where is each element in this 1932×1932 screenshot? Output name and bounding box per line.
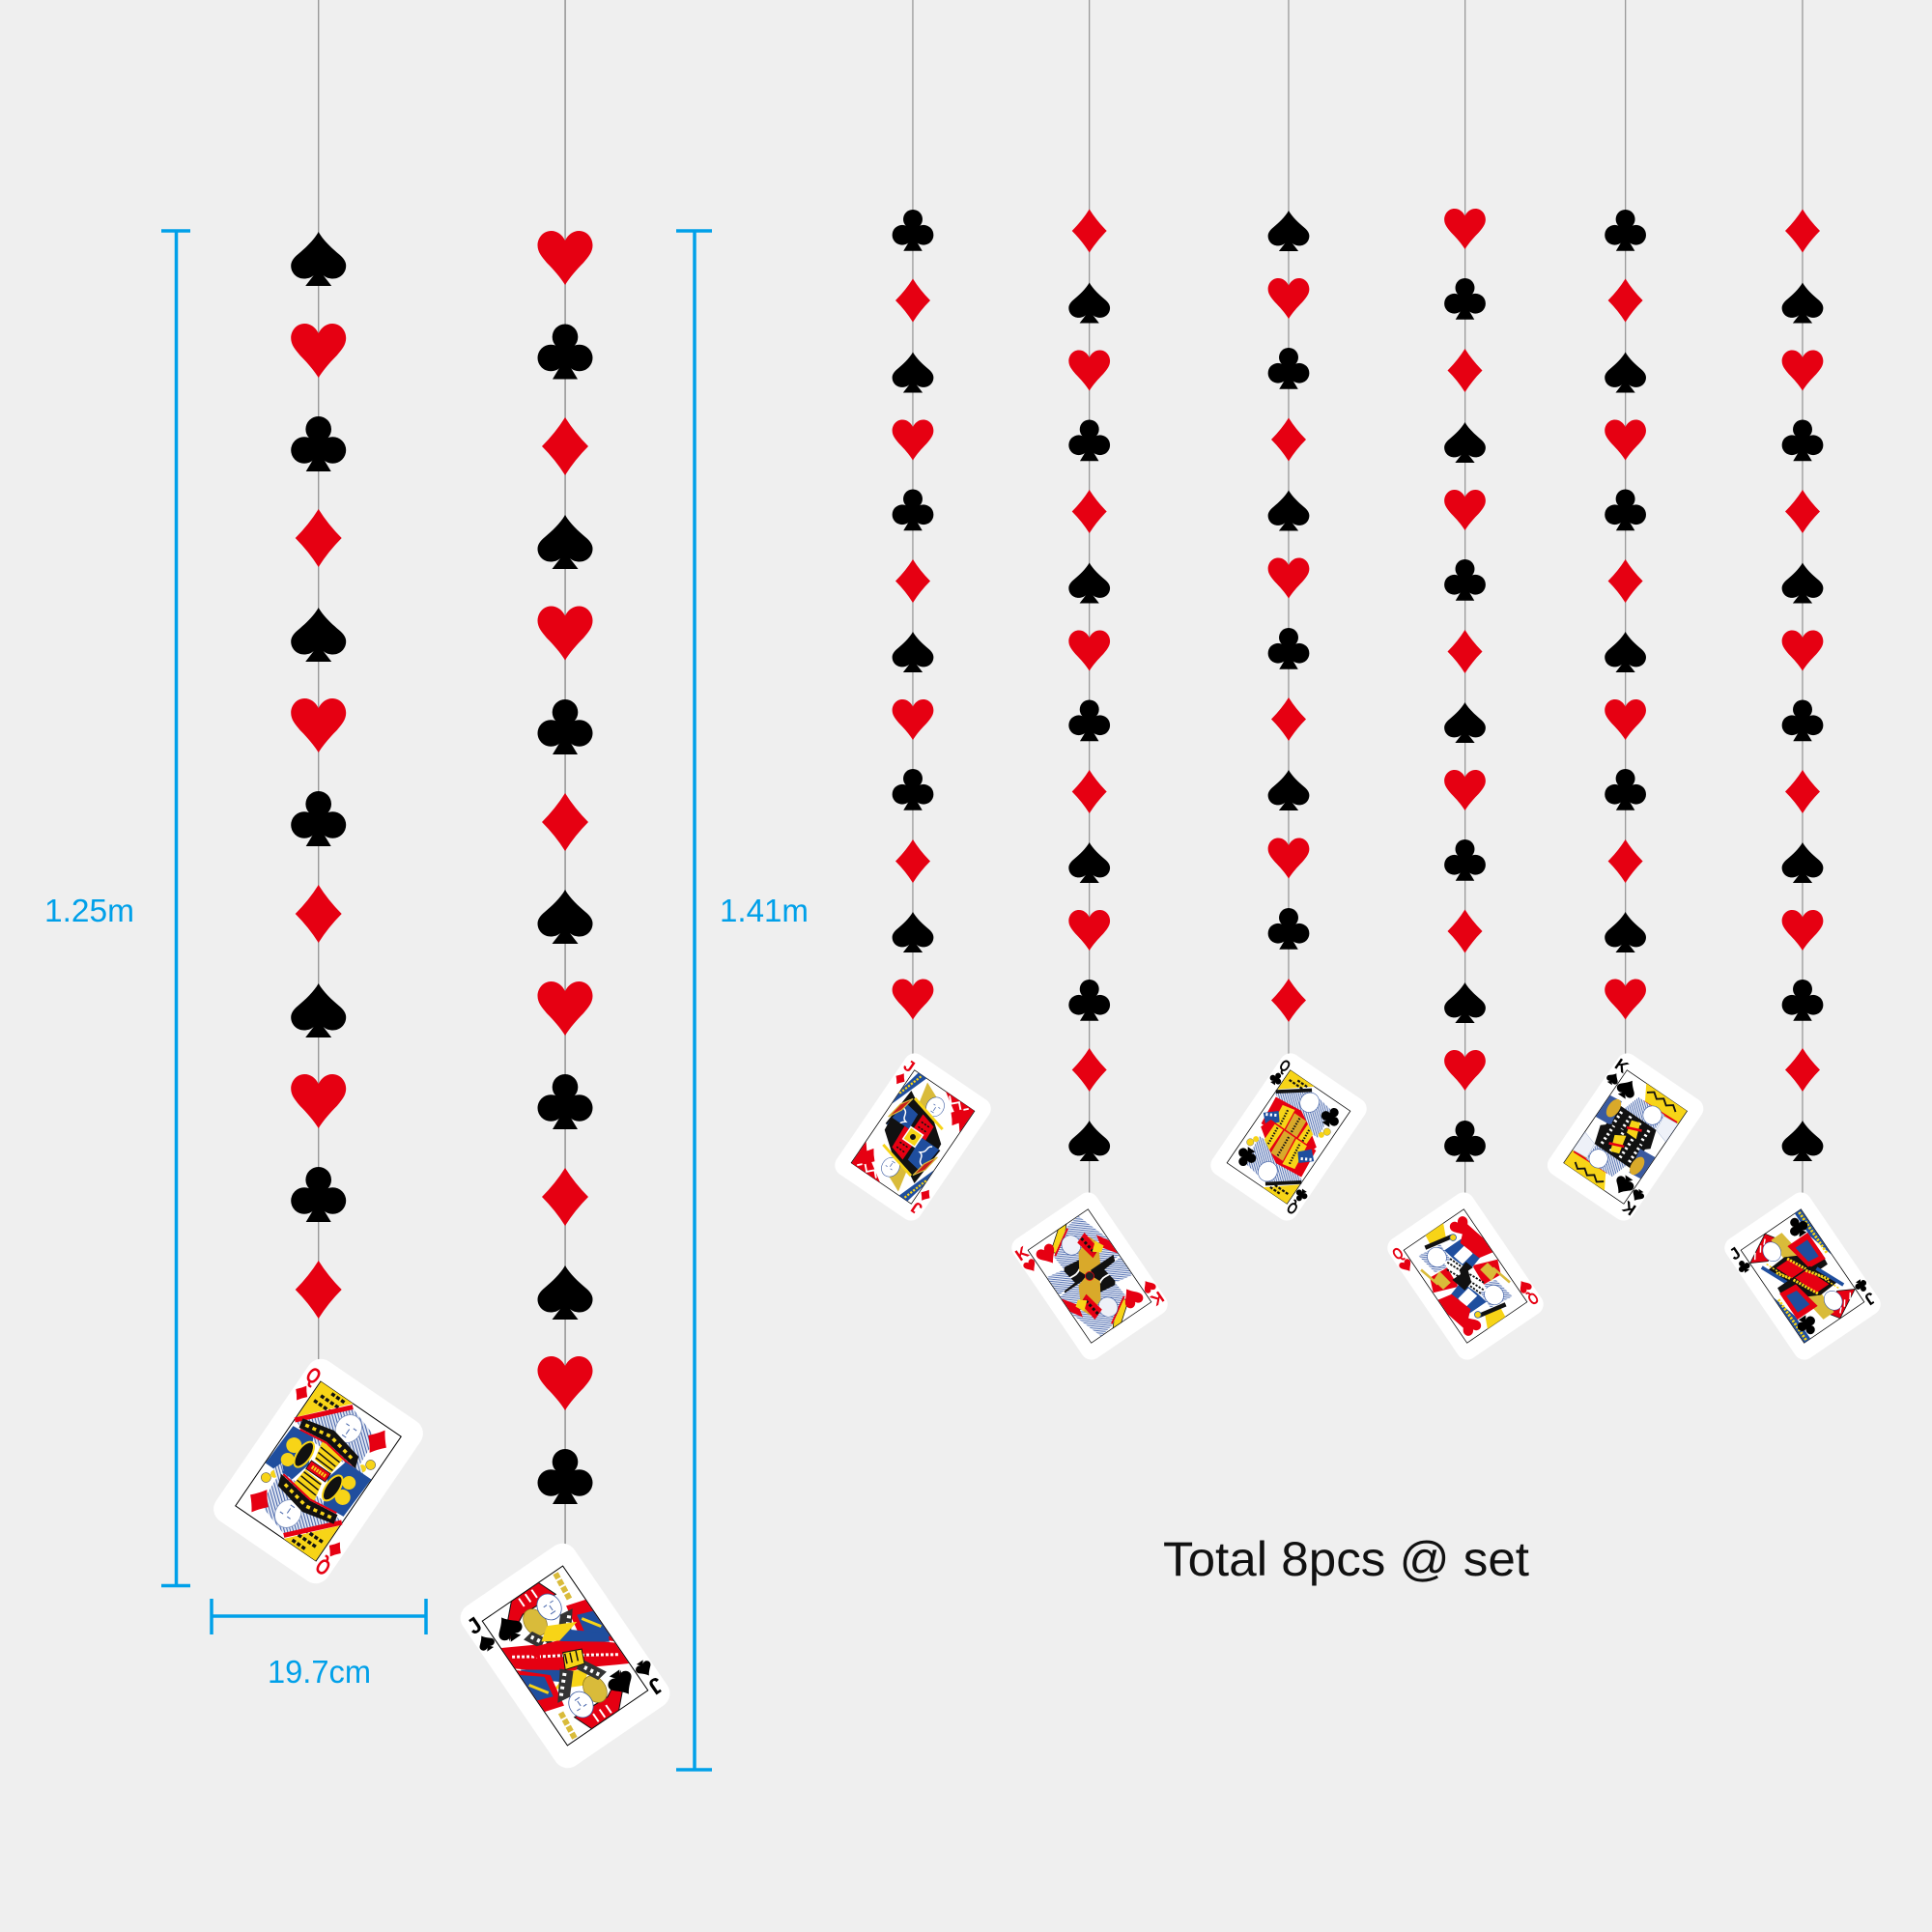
icon: diamond bbox=[1072, 770, 1107, 813]
icon: diamond bbox=[1072, 490, 1107, 533]
icon: diamond bbox=[296, 1261, 342, 1319]
hanging string 1: 1.25m with queen of diamonds bbox=[208, 0, 429, 1589]
icon: diamond bbox=[1785, 770, 1820, 813]
dimension label: 1.41m: 1.41m bbox=[720, 893, 809, 928]
icon: heart bbox=[291, 698, 346, 753]
icon: heart bbox=[1782, 910, 1823, 951]
card: queen of diamonds bbox=[208, 1353, 429, 1589]
icon: diamond bbox=[1271, 979, 1306, 1022]
icon: spade bbox=[537, 515, 593, 569]
icon: spade bbox=[1268, 770, 1309, 810]
hanging string 5: queen of clubs bbox=[1207, 0, 1371, 1225]
icon: diamond bbox=[1072, 1048, 1107, 1092]
hanging string 3: jack of diamonds bbox=[831, 0, 995, 1225]
icon: spade bbox=[1068, 1121, 1110, 1161]
caption: total pieces: Total 8pcs @ set bbox=[1163, 1532, 1529, 1586]
icon: club bbox=[537, 325, 593, 379]
card: king of spades: K bbox=[1611, 1054, 1633, 1077]
icon: heart bbox=[291, 1074, 346, 1128]
icon: heart bbox=[1444, 490, 1486, 530]
icon: club bbox=[893, 489, 933, 530]
icon: club bbox=[1444, 1121, 1486, 1162]
icon: spade bbox=[1444, 702, 1486, 743]
icon: spade bbox=[1782, 562, 1823, 603]
card: queen of hearts: Q bbox=[1523, 1288, 1543, 1309]
icon: diamond bbox=[1608, 839, 1643, 883]
icon: heart bbox=[1444, 209, 1486, 249]
icon: diamond bbox=[1785, 1048, 1820, 1092]
icon: heart bbox=[1444, 1050, 1486, 1091]
icon: spade bbox=[291, 232, 346, 286]
icon: heart bbox=[537, 231, 593, 285]
icon: spade bbox=[1068, 282, 1110, 323]
icon: club bbox=[1268, 628, 1309, 669]
card: king of spades bbox=[1544, 1049, 1708, 1225]
card: king of hearts: K bbox=[1147, 1288, 1168, 1311]
icon: diamond bbox=[1447, 349, 1482, 392]
hanging string 2: 1.41m with jack of spades bbox=[455, 0, 675, 1774]
icon: spade bbox=[1605, 632, 1646, 672]
icon: heart bbox=[893, 699, 933, 740]
icon: heart bbox=[1605, 419, 1646, 460]
icon: spade bbox=[1605, 912, 1646, 952]
icon: diamond bbox=[1072, 209, 1107, 253]
icon: heart bbox=[537, 1356, 593, 1410]
hanging string 6: queen of hearts bbox=[1383, 0, 1548, 1364]
icon: club bbox=[1268, 908, 1309, 950]
icon: heart bbox=[1068, 630, 1110, 670]
icon: diamond bbox=[1447, 910, 1482, 952]
icon: club bbox=[1068, 980, 1110, 1021]
string line bbox=[318, 0, 319, 1362]
icon: club bbox=[893, 210, 933, 251]
icon: club bbox=[1444, 559, 1486, 601]
icon: spade bbox=[1605, 352, 1646, 392]
icon: heart bbox=[1782, 630, 1823, 670]
icon: club bbox=[1068, 699, 1110, 741]
card: queen of clubs: Q bbox=[1276, 1055, 1294, 1076]
icon: heart bbox=[537, 981, 593, 1036]
icon: diamond bbox=[1608, 559, 1643, 603]
card: jack of diamonds bbox=[831, 1049, 995, 1225]
dimension arrow: 19.7cm width bbox=[212, 1599, 426, 1634]
icon: club bbox=[1605, 489, 1646, 530]
card: jack of diamonds: J bbox=[907, 1198, 925, 1219]
card: jack of spades bbox=[455, 1538, 675, 1774]
icon: spade bbox=[1782, 282, 1823, 323]
icon: club bbox=[1782, 699, 1823, 741]
icon: heart bbox=[893, 980, 933, 1020]
card: king of hearts: K bbox=[1011, 1241, 1033, 1264]
hanging string 8: jack of clubs bbox=[1720, 0, 1885, 1364]
icon: diamond bbox=[1271, 697, 1306, 741]
icon: spade bbox=[893, 912, 933, 952]
icon: club bbox=[291, 791, 346, 846]
card: jack of clubs bbox=[1720, 1188, 1885, 1364]
string line bbox=[1089, 0, 1090, 1196]
string line bbox=[1802, 0, 1804, 1196]
icon: spade bbox=[291, 983, 346, 1037]
icon: spade bbox=[291, 608, 346, 662]
card: queen of hearts: Q bbox=[1388, 1243, 1407, 1264]
icon: club bbox=[537, 1449, 593, 1504]
icon: heart bbox=[537, 607, 593, 661]
icon: spade bbox=[1268, 211, 1309, 251]
icon: spade bbox=[1444, 422, 1486, 463]
card: king of hearts bbox=[1008, 1188, 1172, 1364]
icon: heart bbox=[1444, 770, 1486, 810]
icon: spade bbox=[1068, 842, 1110, 883]
card: queen of hearts bbox=[1383, 1188, 1548, 1364]
icon: spade bbox=[1444, 982, 1486, 1023]
icon: diamond bbox=[895, 559, 930, 603]
icon: club bbox=[537, 1074, 593, 1129]
string line bbox=[1464, 0, 1465, 1196]
icon: diamond bbox=[296, 509, 342, 567]
icon: heart bbox=[1068, 350, 1110, 390]
icon: diamond bbox=[1447, 630, 1482, 673]
icon: diamond bbox=[542, 417, 588, 475]
icon: spade bbox=[537, 1265, 593, 1320]
icon: spade bbox=[893, 632, 933, 672]
icon: heart bbox=[893, 419, 933, 460]
card: jack of spades: J bbox=[644, 1672, 668, 1700]
icon: spade bbox=[1782, 1121, 1823, 1161]
card: queen of diamonds: Q bbox=[301, 1362, 326, 1389]
card: queen of clubs: Q bbox=[1283, 1198, 1301, 1219]
icon: heart bbox=[1605, 980, 1646, 1020]
icon: diamond bbox=[1271, 417, 1306, 462]
icon: heart bbox=[1268, 558, 1309, 599]
dimension label: 1.25m: 1.25m bbox=[44, 893, 134, 928]
icon: club bbox=[1782, 980, 1823, 1021]
card: jack of diamonds: J bbox=[900, 1055, 919, 1076]
hanging string 4: king of hearts bbox=[1008, 0, 1172, 1364]
icon: spade bbox=[893, 352, 933, 392]
icon: club bbox=[893, 769, 933, 810]
card: jack of clubs: J bbox=[1861, 1289, 1880, 1309]
icon: spade bbox=[1268, 491, 1309, 531]
string line bbox=[912, 0, 914, 1058]
icon: diamond bbox=[296, 885, 342, 943]
icon: club bbox=[537, 699, 593, 754]
icon: heart bbox=[1268, 838, 1309, 879]
card: jack of clubs: J bbox=[1725, 1243, 1744, 1264]
icon: spade bbox=[1068, 562, 1110, 603]
icon: heart bbox=[1605, 699, 1646, 740]
icon: diamond bbox=[542, 1168, 588, 1226]
dimension arrow: 1.41m height bbox=[676, 231, 712, 1770]
card: king of spades: K bbox=[1618, 1197, 1639, 1220]
icon: diamond bbox=[1608, 278, 1643, 323]
string line bbox=[1288, 0, 1290, 1058]
hanging string 7: king of spades bbox=[1544, 0, 1708, 1225]
icon: club bbox=[1782, 419, 1823, 461]
dimension arrow: 1.25m height bbox=[161, 231, 190, 1586]
icon: heart bbox=[1782, 350, 1823, 390]
icon: diamond bbox=[895, 278, 930, 323]
icon: club bbox=[1444, 839, 1486, 881]
icon: club bbox=[1605, 769, 1646, 810]
icon: diamond bbox=[1785, 209, 1820, 253]
icon: heart bbox=[1068, 910, 1110, 951]
icon: diamond bbox=[1785, 490, 1820, 533]
icon: club bbox=[1068, 419, 1110, 461]
string line bbox=[564, 0, 566, 1546]
icon: heart bbox=[1268, 278, 1309, 319]
icon: club bbox=[1444, 278, 1486, 320]
icon: diamond bbox=[895, 839, 930, 883]
icon: club bbox=[291, 1167, 346, 1222]
icon: spade bbox=[1782, 842, 1823, 883]
card: queen of diamonds: Q bbox=[311, 1553, 335, 1580]
icon: club bbox=[1268, 348, 1309, 389]
card: jack of spades: J bbox=[462, 1611, 486, 1639]
icon: heart bbox=[291, 324, 346, 378]
icon: club bbox=[291, 416, 346, 471]
icon: club bbox=[1605, 210, 1646, 251]
icon: spade bbox=[537, 890, 593, 944]
card: queen of clubs bbox=[1207, 1049, 1371, 1225]
string line bbox=[1625, 0, 1626, 1058]
dimension label: 19.7cm: 19.7cm bbox=[268, 1654, 371, 1690]
icon: diamond bbox=[542, 793, 588, 851]
